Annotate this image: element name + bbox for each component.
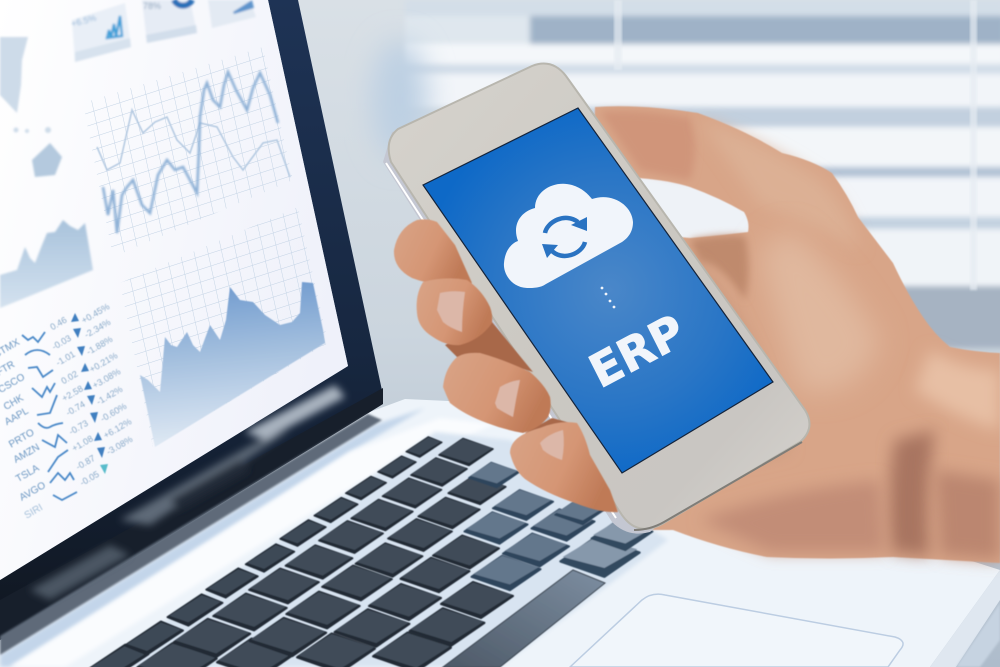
hand: palm, thumb and wrist	[590, 106, 1000, 563]
stock ticker table: 0.46	[48, 315, 69, 332]
stock ticker table: +3.08%	[91, 366, 122, 390]
stock ticker table: -1.88%	[85, 334, 114, 357]
stock ticker table: AAPL	[3, 405, 31, 428]
stock ticker table: TSLA	[14, 463, 42, 485]
fingers gripping the phone	[394, 219, 618, 512]
keyboard well	[100, 432, 668, 667]
stock ticker table: -1.01	[54, 349, 77, 368]
stock ticker table: AVGO	[18, 480, 48, 504]
stock ticker table: +0.45%	[80, 301, 111, 325]
icon: cloud with sync arrows	[504, 184, 633, 288]
gap between thumb and palm showing blinds	[638, 178, 748, 238]
stock ticker table: SIRI	[23, 502, 45, 521]
finger 4	[510, 422, 618, 512]
connector dots	[601, 287, 615, 308]
stock ticker table: +0.21%	[88, 350, 119, 374]
laptop screen with dashboard	[0, 0, 348, 580]
stock ticker table: -0.74	[64, 399, 87, 418]
finger 2	[417, 278, 492, 345]
phone screen	[423, 108, 773, 473]
hand shading	[600, 111, 1000, 560]
top widget tiles	[70, 0, 256, 62]
finger shadows	[445, 322, 578, 440]
laptop screen bezel and hinge	[0, 0, 383, 655]
stock ticker table: +6.12%	[102, 416, 133, 440]
stock ticker table: PRTO	[7, 427, 37, 450]
top widget tiles: 78%	[143, 1, 161, 11]
spacebar	[443, 570, 605, 667]
phone metal side	[383, 130, 662, 534]
phone front face	[389, 64, 809, 529]
finger 3	[443, 353, 551, 433]
area chart panel	[120, 207, 328, 447]
stock ticker table: -0.03	[50, 333, 73, 352]
laptop body and keyboard deck	[0, 399, 1000, 667]
stock ticker table: +1.08	[70, 433, 95, 453]
stock ticker table	[0, 301, 134, 521]
stock ticker table: CHK	[2, 393, 26, 413]
line chart panel	[83, 47, 293, 257]
stock ticker table: -1.42%	[95, 384, 124, 407]
stock ticker table: -2.34%	[83, 317, 112, 340]
ERP label: ERP	[581, 303, 693, 399]
left area chart	[0, 220, 93, 308]
trackpad	[570, 594, 903, 667]
stock ticker table: -0.73	[67, 418, 90, 437]
smartphone	[383, 64, 809, 534]
stock ticker table: -3.08%	[105, 434, 134, 457]
stock ticker table: AMZN	[12, 442, 42, 466]
stock ticker table: -0.05	[78, 469, 101, 488]
stock ticker table: +2.58	[60, 383, 85, 403]
finger 1	[394, 219, 472, 283]
world map	[0, 37, 62, 177]
stock ticker table: 0.02	[59, 369, 80, 386]
top widget tiles: +6.5%	[70, 13, 97, 29]
stock ticker table: -0.60%	[99, 401, 128, 424]
keyboard keys	[88, 437, 653, 667]
stock ticker table: -0.87	[74, 453, 97, 472]
